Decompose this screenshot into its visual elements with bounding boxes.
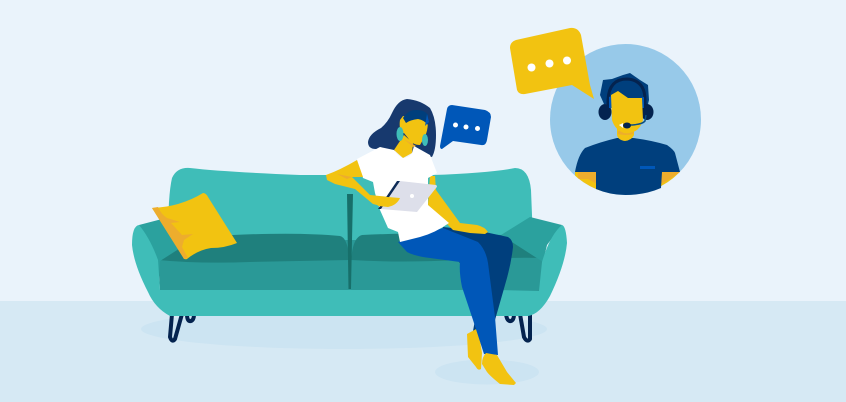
headphone band <box>608 79 645 108</box>
speech bubble: agent <box>510 28 594 99</box>
back leg <box>440 227 513 331</box>
back foot <box>467 328 482 370</box>
sofa legs <box>170 314 530 341</box>
hand over tablet <box>373 196 400 207</box>
foot shadow <box>435 360 539 384</box>
earring left <box>396 127 404 141</box>
left arm top <box>139 219 185 290</box>
arm on sofa <box>326 160 400 207</box>
fringe highlight <box>425 114 429 126</box>
speech bubble: woman <box>440 105 491 149</box>
fringe <box>403 110 428 125</box>
pocket <box>640 166 655 169</box>
microphone <box>619 115 646 128</box>
arms <box>575 172 680 190</box>
tablet <box>378 181 437 212</box>
ear cups <box>598 104 612 120</box>
torso <box>575 138 680 195</box>
seat cushion tops <box>160 234 537 268</box>
agent portrait <box>550 44 701 198</box>
wall background <box>0 0 846 302</box>
right arm top <box>501 217 562 262</box>
hair sides <box>609 96 644 108</box>
cushion pillow <box>152 193 237 259</box>
face <box>611 91 643 133</box>
earring right <box>422 134 428 146</box>
neck shade <box>404 139 416 147</box>
neck <box>617 125 634 141</box>
neck shade <box>618 131 634 135</box>
portrait circle <box>550 44 701 195</box>
floor <box>0 301 846 402</box>
sofa shadow <box>141 309 547 349</box>
hair <box>600 73 649 108</box>
hair <box>368 99 436 157</box>
seat cushion fronts <box>158 258 543 291</box>
sofa base and arms <box>132 225 567 316</box>
sofa centre seam <box>347 194 353 289</box>
neck <box>394 135 413 158</box>
sofa <box>132 168 567 341</box>
front foot <box>482 353 516 385</box>
face <box>400 116 428 145</box>
woman <box>326 99 516 385</box>
underarm shade <box>337 174 352 179</box>
seat underlay <box>160 240 542 292</box>
front leg <box>398 228 498 355</box>
arm behind shirt <box>428 176 488 234</box>
sofa backrest <box>168 168 533 240</box>
shirt <box>357 146 449 242</box>
